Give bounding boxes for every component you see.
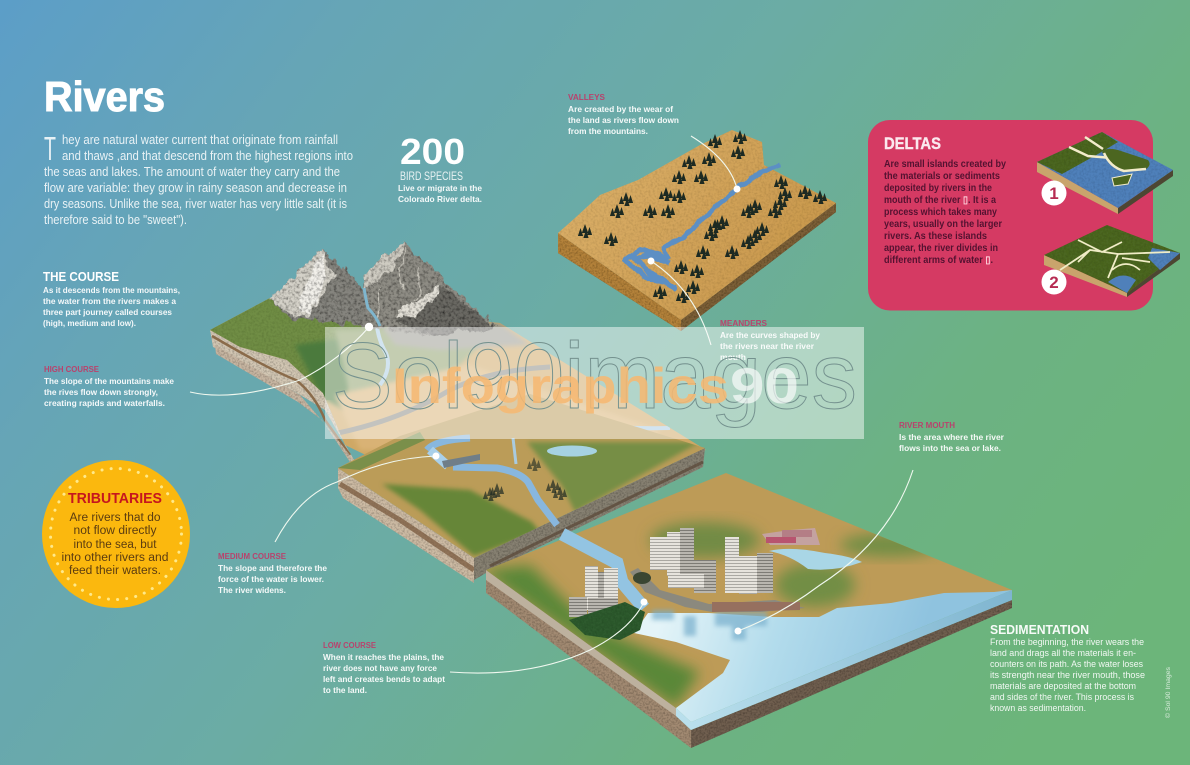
- intro text: T: [44, 130, 56, 167]
- text: low course: When it reaches the plains, the: [323, 652, 444, 662]
- callout lines and dots: [190, 136, 913, 673]
- watermark: Sol90images: [332, 323, 857, 428]
- valley river: [624, 165, 779, 288]
- panel: deltas: Are small islands created by: [884, 159, 1006, 170]
- text: medium course: The slope and therefore the: [218, 563, 327, 573]
- text: high course: HIGH COURSE: [44, 365, 100, 374]
- city reflection: [652, 610, 767, 640]
- text: low course: to the land.: [323, 685, 367, 695]
- tributaries badge: Are rivers that do: [70, 512, 160, 524]
- tributaries badge: feed their waters.: [69, 565, 161, 577]
- text: valleys: Are created by the wear of: [568, 104, 673, 114]
- text: river mouth: Is the area where the river: [899, 432, 1005, 442]
- text: medium course: MEDIUM COURSE: [218, 552, 287, 561]
- high course land: [210, 298, 706, 510]
- text: meanders: mouth: [720, 352, 746, 362]
- mountain river: [364, 288, 380, 326]
- mountains: [268, 243, 498, 335]
- intro text: dry seasons. Unlike the sea, river water has very little salt (it is: [44, 197, 347, 211]
- terrain: medium course block: [338, 394, 705, 583]
- panel: deltas: the materials or sediments: [884, 171, 1000, 182]
- stat: 200 bird species: 200: [400, 131, 465, 172]
- intro text: hey are natural water current that originate from rainfall: [62, 133, 338, 147]
- panel: deltas: appear, the river divides in: [884, 243, 998, 254]
- island base: [630, 568, 805, 612]
- text: river mouth: flows into the sea or lake.: [899, 443, 1001, 453]
- title: Rivers: [44, 73, 165, 120]
- marker 2: [1042, 270, 1066, 294]
- watermark: Infographics: [392, 358, 729, 414]
- high course cross-section: [210, 330, 360, 470]
- marker 1: [1042, 180, 1066, 206]
- sea front face: [676, 590, 1012, 730]
- tributaries badge: TRIBUTARIES: [68, 491, 162, 507]
- tributaries badge: into the sea, but: [74, 539, 157, 551]
- text: high course: creating rapids and waterfalls.: [44, 398, 165, 408]
- low course land: [486, 473, 1012, 708]
- text: the course: [43, 270, 180, 328]
- intro text: the seas and lakes. The amount of water they carry and the: [44, 165, 340, 179]
- text: sedimentation: land and drags all the materials it en-: [990, 648, 1136, 658]
- marker 1: 1: [1049, 184, 1059, 203]
- tributaries badge: [42, 460, 190, 608]
- watermark: 90: [730, 358, 799, 414]
- medium course shrubs: [483, 457, 567, 501]
- medium course right wall: [474, 448, 705, 580]
- text: high course: [44, 365, 174, 408]
- panel: deltas: mouth of the river ▯. It is a: [884, 195, 996, 206]
- text: valleys: from the mountains.: [568, 126, 648, 136]
- stat: 200 bird species: Live or migrate in the: [398, 183, 482, 193]
- medium course left wall: [338, 468, 474, 583]
- pink complex: [762, 528, 820, 545]
- pond: [769, 549, 862, 570]
- forest: [569, 602, 645, 640]
- panel: deltas: [868, 120, 1153, 310]
- text: sedimentation: SEDIMENTATION: [990, 622, 1089, 637]
- delta diagram 1: [1037, 132, 1173, 214]
- text: river mouth: [899, 421, 1005, 453]
- text: meanders: the rivers near the river: [720, 341, 815, 351]
- text: the course: As it descends from the mountains,: [43, 285, 180, 295]
- text: meanders: Are the curves shaped by: [720, 330, 820, 340]
- text: the course: three part journey called courses: [43, 307, 172, 317]
- text: the course: (high, medium and low).: [43, 318, 136, 328]
- text: low course: river does not have any force: [323, 663, 437, 673]
- low course river: [562, 534, 644, 608]
- text: sedimentation: materials are deposited at the bottom: [990, 681, 1136, 691]
- tributaries badge: into other rivers and: [62, 552, 168, 564]
- valley surface: [558, 130, 836, 320]
- intro text: [44, 130, 353, 227]
- text: the course: THE COURSE: [43, 270, 119, 284]
- text: river mouth: RIVER MOUTH: [899, 421, 955, 430]
- stat: 200 bird species: BIRD SPECIES: [400, 171, 463, 183]
- intro text: therefore said to be "sweet").: [44, 213, 187, 227]
- text: high course: The slope of the mountains make: [44, 376, 174, 386]
- text: valleys: VALLEYS: [568, 93, 606, 102]
- text: medium course: [218, 552, 327, 595]
- intro text: flow are variable: they grow in rainy season and decrease in: [44, 181, 347, 195]
- text: meanders: [720, 319, 820, 362]
- panel: deltas: process which takes many: [884, 207, 997, 218]
- panel: deltas: years, usually on the larger: [884, 219, 1002, 230]
- medium course land: [338, 394, 705, 558]
- left towers: [569, 566, 618, 617]
- terrain: low course block: [480, 473, 1012, 748]
- text: medium course: The river widens.: [218, 585, 286, 595]
- intro text: and thaws ,and that descend from the highest regions into: [62, 149, 353, 163]
- text: sedimentation: counters on its path. As the water loses: [990, 659, 1143, 669]
- valley trees: [578, 130, 827, 303]
- tributaries badge: not flow directly: [74, 525, 157, 537]
- medium course lake: [547, 446, 597, 456]
- valley base: [558, 203, 836, 331]
- panel: deltas: DELTAS: [884, 134, 941, 153]
- text: sedimentation: and sides of the river. This process is: [990, 692, 1134, 702]
- stat: 200 bird species: Colorado River delta.: [398, 194, 482, 204]
- panel: deltas: deposited by rivers in the: [884, 183, 992, 194]
- text: the course: the water from the rivers makes a: [43, 296, 176, 306]
- city towers: [650, 528, 773, 594]
- text: high course: the rives flow down strongly,: [44, 387, 158, 397]
- medium course dam: [442, 454, 480, 468]
- stat: 200 bird species: [398, 131, 482, 204]
- text: sedimentation: From the beginning, the river wears the: [990, 637, 1144, 647]
- text: sedimentation: known as sedimentation.: [990, 703, 1086, 713]
- text: valleys: [568, 93, 679, 136]
- terrain: high course block: [210, 241, 706, 462]
- low course left wall: [486, 570, 691, 748]
- delta diagram 2: [1044, 225, 1180, 297]
- text: meanders: MEANDERS: [720, 319, 768, 328]
- text: sedimentation: [990, 622, 1145, 713]
- copyright: © Sol 90 Images: [1164, 666, 1172, 718]
- marker 2: 2: [1049, 273, 1059, 292]
- text: low course: LOW COURSE: [323, 641, 377, 650]
- medium course river: [427, 438, 557, 525]
- text: low course: [323, 641, 445, 695]
- text: low course: left and creates bends to adapt: [323, 674, 445, 684]
- sea: [634, 590, 1012, 722]
- terrain: valley block: [558, 130, 836, 331]
- text: medium course: force of the water is lower.: [218, 574, 324, 584]
- panel: deltas: different arms of water ▯.: [884, 255, 993, 266]
- low course right wall: [691, 600, 1012, 748]
- panel: deltas: rivers. As these islands: [884, 231, 987, 242]
- text: sedimentation: its strength near the river mouth, those: [990, 670, 1145, 680]
- text: valleys: the land as rivers flow down: [568, 115, 679, 125]
